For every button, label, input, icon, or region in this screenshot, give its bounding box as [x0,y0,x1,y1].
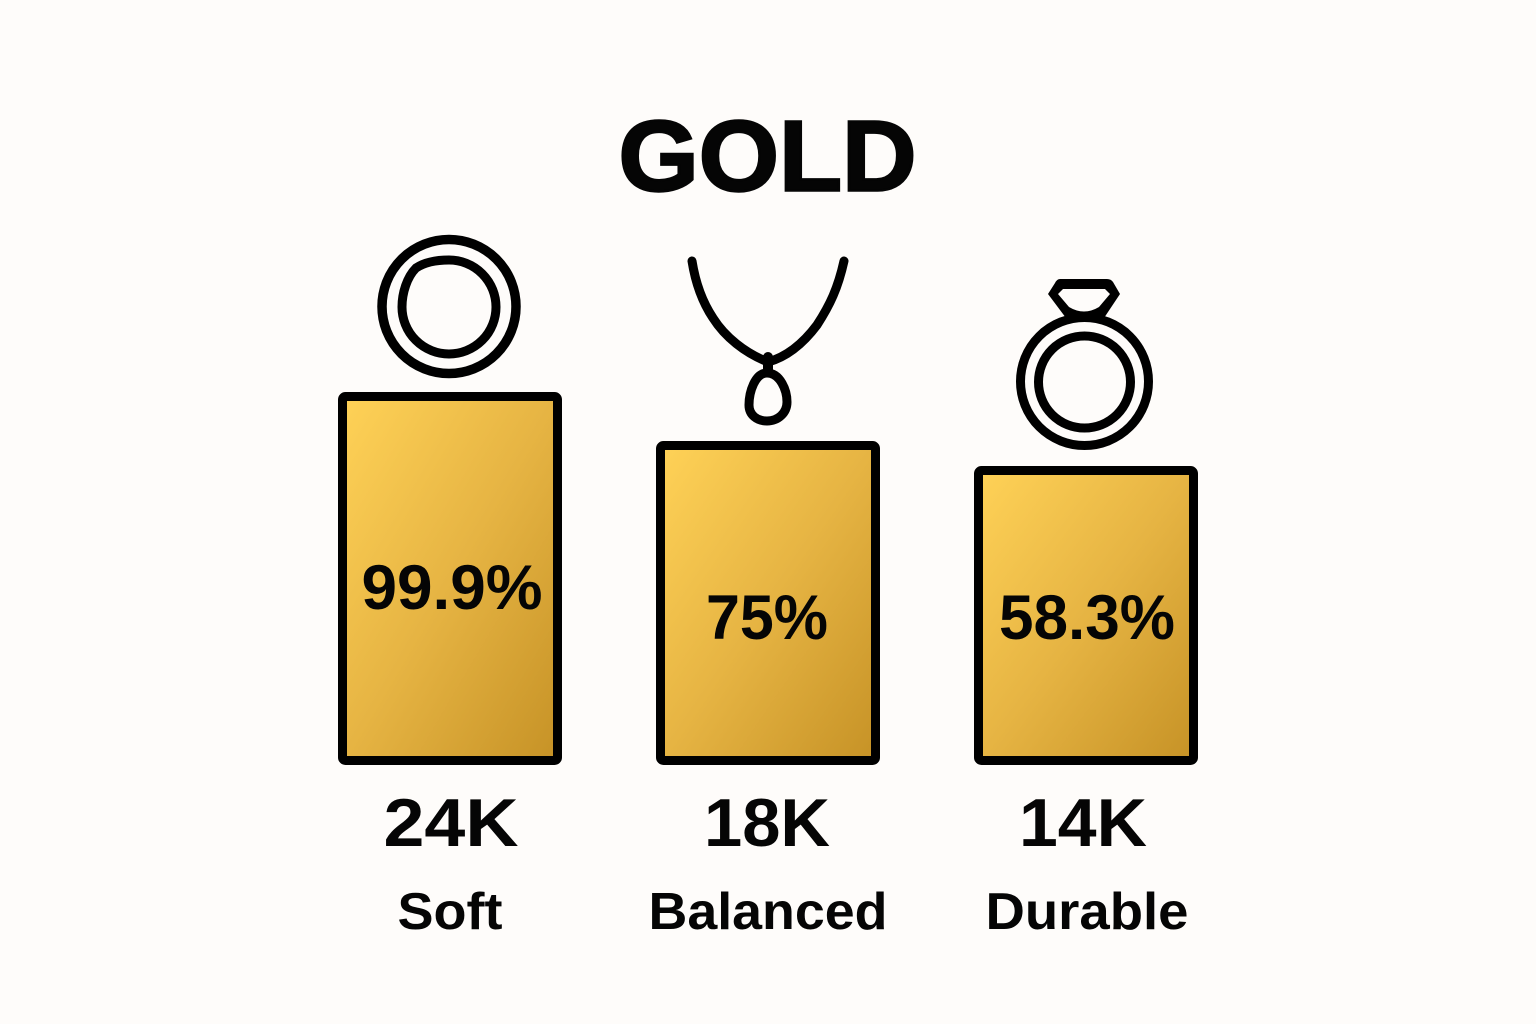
karat label: 24K: 24K [384,785,518,861]
percentage: 75%: 75% [706,583,828,653]
descriptor: Soft: Soft [398,883,502,941]
gold bar: 18K [660,446,876,760]
icon: necklace with pendant [692,261,844,421]
karat label: 14K: 14K [1019,785,1147,861]
gold bar: 14K [978,470,1194,760]
descriptor: Durable: Durable [986,883,1188,941]
percentage: 58.3%: 58.3% [999,583,1175,653]
gold bar: 24K [342,396,558,760]
percentage: 99.9%: 99.9% [362,553,542,623]
icon: diamond ring [1020,279,1148,446]
column: 18K [648,261,888,941]
karat label: 18K: 18K [704,785,830,861]
title: GOLD [618,100,916,212]
descriptor: Balanced: Balanced [648,883,888,941]
column: 14K [978,279,1194,941]
column: 24K [342,240,558,941]
icon: plain ring [382,240,516,374]
